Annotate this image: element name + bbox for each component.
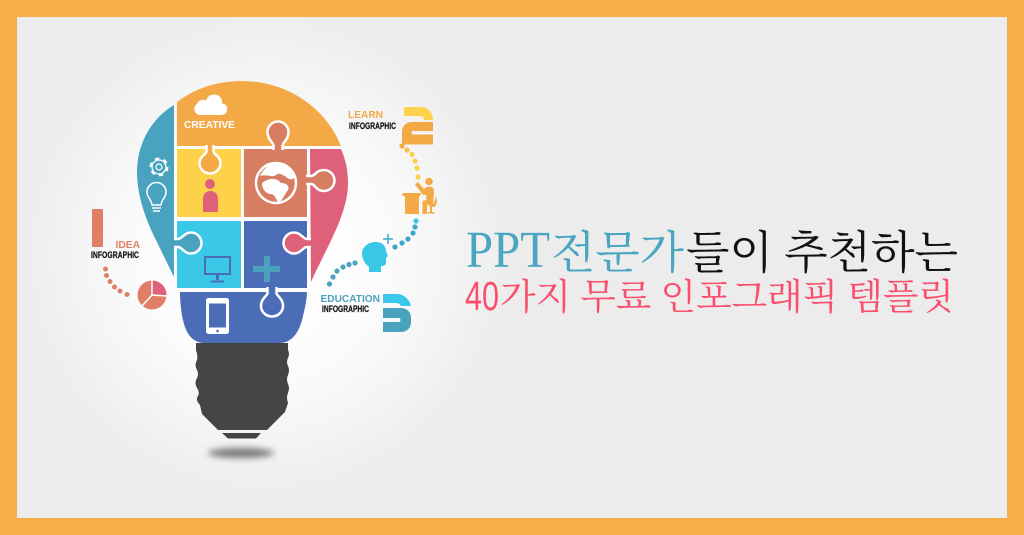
knob: terracotta into orange — [268, 122, 288, 150]
icon: small bulb — [147, 182, 166, 211]
icon: plus — [253, 256, 280, 282]
bulb base tip — [222, 433, 261, 438]
knob: orange into yellow — [200, 145, 220, 174]
title line 1 — [466, 222, 958, 279]
label: creative: CREATIVE — [184, 119, 235, 131]
icon: gear — [150, 158, 168, 176]
title: number 40: 40 — [465, 273, 499, 319]
piece: blue — [244, 221, 307, 288]
piece: pink right — [310, 149, 348, 282]
piece: cyan — [177, 221, 241, 288]
piece: yellow — [177, 149, 241, 217]
piece: orange top — [177, 81, 341, 146]
knob: blue into bottom — [261, 287, 283, 316]
icon: head — [362, 242, 388, 272]
knob: teal into cyan — [174, 232, 202, 254]
icon: pie chart — [138, 280, 167, 310]
title: teal hangul: 전문가 — [551, 228, 685, 278]
label: idea: IDEA — [116, 239, 140, 251]
piece: blue bottom — [180, 292, 307, 343]
label: idea infographic: INFOGRAPHIC — [91, 250, 139, 261]
learn dots — [399, 143, 421, 180]
title: red hangul: 가지 무료 인포그래픽 템플릿 — [500, 277, 954, 317]
knob: terracotta into pink — [306, 170, 334, 191]
light bulb puzzle — [137, 81, 348, 438]
icon: person at desk — [402, 178, 437, 214]
label: education infographic: INFOGRAPHIC — [322, 304, 369, 315]
title line 2 — [465, 273, 954, 319]
numeral 5 — [383, 294, 411, 332]
education dots bottom — [327, 260, 358, 287]
piece: terracotta — [244, 149, 307, 217]
numeral 2 — [402, 107, 433, 144]
label: education: EDUCATION — [320, 293, 380, 305]
icon: person — [203, 179, 218, 212]
knob: pink into blue — [284, 232, 311, 254]
label: learn infographic: INFOGRAPHIC — [349, 121, 396, 132]
bulb shadow — [208, 448, 274, 458]
icon: cloud — [194, 94, 227, 115]
title: black part: 들이 추천하는 — [686, 228, 958, 278]
icon: globe — [256, 163, 296, 203]
idea numeral I — [92, 209, 103, 247]
piece: teal left — [137, 105, 174, 277]
icon: phone — [206, 298, 229, 334]
icon: monitor — [205, 257, 230, 282]
title: PPT: PPT — [466, 222, 550, 279]
idea dots — [103, 266, 130, 297]
bulb screw base — [196, 343, 289, 430]
label: learn: LEARN — [348, 109, 383, 121]
education dots top — [392, 218, 419, 250]
icon: plus small — [383, 234, 393, 244]
